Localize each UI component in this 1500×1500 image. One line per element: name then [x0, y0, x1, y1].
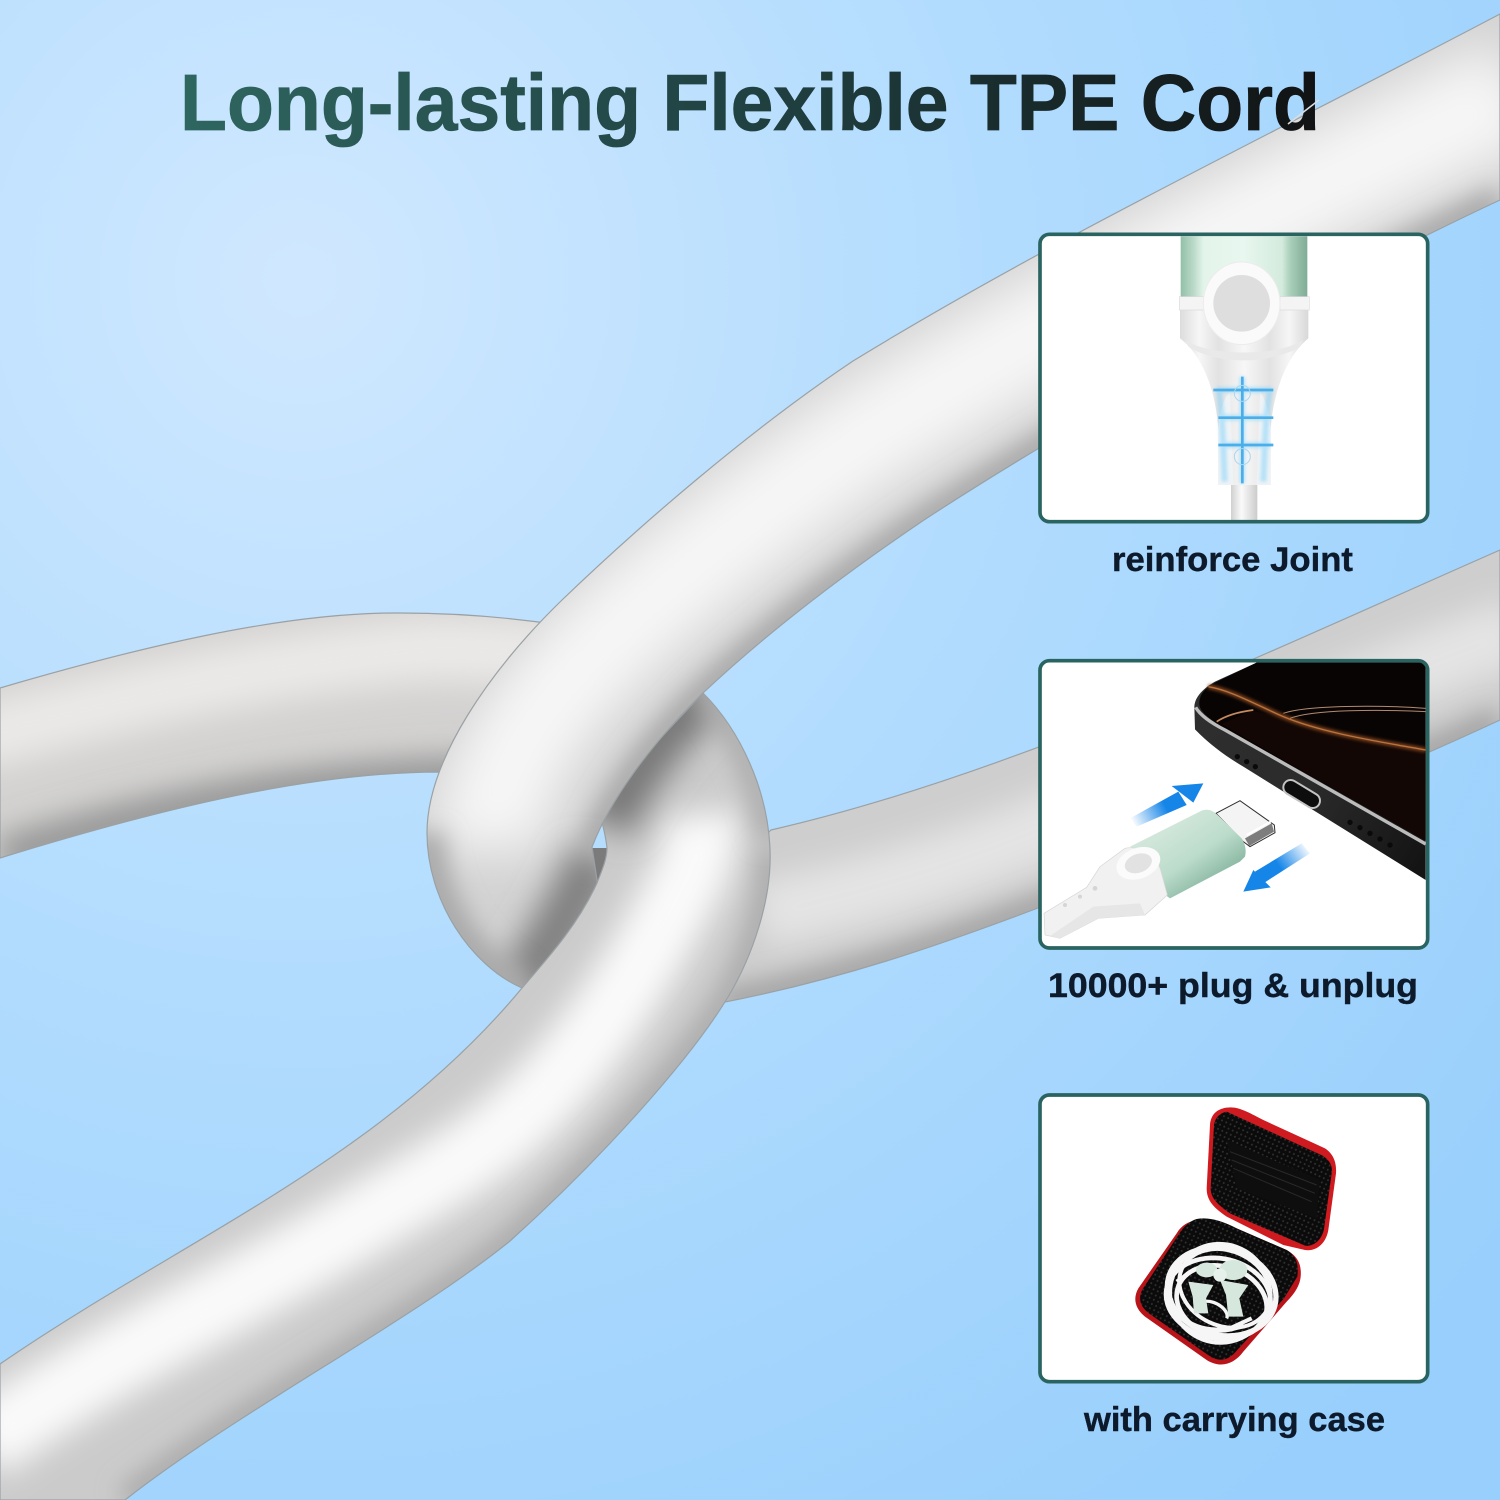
arrow: plug in — [1130, 783, 1203, 827]
arrow: unplug — [1243, 843, 1310, 892]
phone — [1194, 663, 1426, 880]
cable: lower strand, rear section of loop — [602, 693, 770, 846]
case base — [1135, 1218, 1301, 1365]
panel: carrying case — [1040, 1095, 1428, 1382]
USB-C plug — [1130, 801, 1275, 898]
speaker holes — [1235, 754, 1393, 848]
white boot — [1044, 841, 1167, 938]
cable: top strand with loop — [427, 14, 1500, 990]
cable hole: dark patch behind the knot — [585, 848, 615, 888]
connector: green metal shell — [1181, 236, 1307, 303]
cable: right strand — [700, 550, 1500, 1003]
coiled cable and green plugs — [1156, 1230, 1286, 1357]
caption: reinforce Joint: reinforce Joint — [1112, 541, 1353, 579]
panel: plug and unplug — [1040, 661, 1428, 948]
oval ring on boot — [1203, 262, 1280, 345]
panel: reinforce joint — [1040, 234, 1428, 522]
charging port — [1291, 787, 1313, 801]
caption: with carrying case: with carrying case — [1083, 1401, 1385, 1439]
caption: 10000+ plug & unplug: 10000+ plug & unplug — [1048, 967, 1418, 1005]
blue reinforcement grid — [1213, 377, 1273, 483]
cable edge over title — [1288, 100, 1319, 124]
case lid — [1207, 1107, 1336, 1250]
cable: lower strand, front section — [0, 846, 771, 1500]
cable: thin cord below boot — [1231, 483, 1257, 520]
strain relief boot — [1179, 297, 1309, 485]
cable: left strand — [0, 613, 600, 858]
title: Long-lasting Flexible TPE Cord — [180, 58, 1320, 147]
